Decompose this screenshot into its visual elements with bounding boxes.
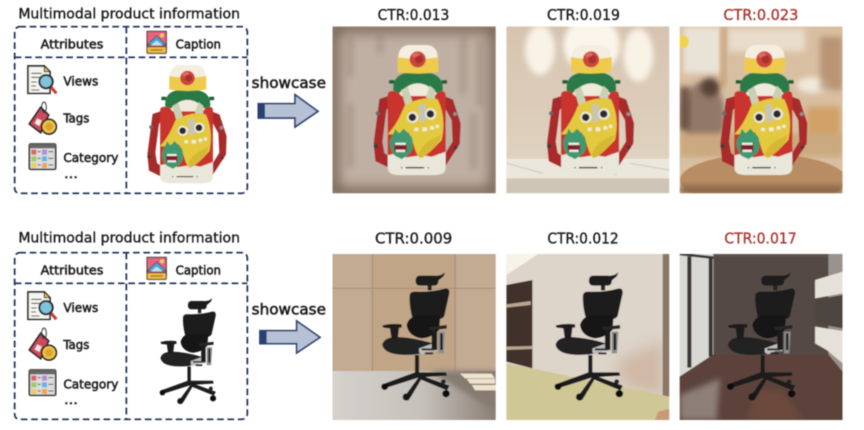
views label: Views bbox=[63, 301, 98, 315]
showcase label: showcase bbox=[252, 301, 326, 318]
views label: Views bbox=[63, 75, 98, 89]
showcase image: cream wall with shelf bbox=[506, 254, 669, 420]
heading: multimodal product information: Multimodal product information bbox=[18, 6, 240, 22]
category label: Category bbox=[63, 377, 118, 391]
dashed frame bbox=[15, 27, 247, 193]
icon: category bbox=[29, 370, 56, 395]
product image: bottle bbox=[147, 65, 226, 183]
category label: Category bbox=[63, 151, 118, 165]
showcase image: beige panel room bbox=[333, 254, 496, 420]
showcase image: blurred cafe bbox=[675, 27, 847, 206]
icon: caption picture bbox=[147, 257, 166, 279]
product image: chair bbox=[160, 298, 216, 404]
CTR label 0.019: CTR:0.019 bbox=[547, 7, 620, 24]
icon: caption picture bbox=[147, 31, 166, 53]
ellipsis: ... bbox=[64, 393, 78, 407]
showcase image: spotlit shelf bbox=[506, 17, 669, 193]
ellipsis: ... bbox=[64, 167, 78, 181]
tags label: Tags bbox=[62, 338, 89, 352]
caption heading: Caption bbox=[176, 37, 221, 51]
dashed frame bbox=[15, 253, 247, 419]
showcase image: painted wall bbox=[333, 27, 496, 193]
caption heading: Caption bbox=[176, 263, 221, 277]
showcase image: dark office bbox=[680, 254, 843, 420]
attributes heading: Attributes bbox=[41, 37, 103, 51]
CTR label 0.013: CTR:0.013 bbox=[378, 7, 449, 24]
icon: category bbox=[29, 144, 56, 169]
arrow bbox=[259, 321, 320, 353]
top row: product information bbox=[15, 6, 326, 193]
icon: views bbox=[28, 292, 56, 319]
panel: attributes and caption bbox=[15, 27, 247, 193]
CTR label 0.017: CTR:0.017 bbox=[724, 230, 797, 247]
icon: tags bbox=[29, 328, 56, 360]
CTR label 0.012: CTR:0.012 bbox=[547, 230, 619, 247]
icon: tags bbox=[29, 102, 56, 134]
arrow bbox=[258, 95, 318, 127]
tags label: Tags bbox=[62, 112, 89, 126]
bottom row: generated showcases bbox=[333, 230, 843, 420]
CTR label 0.023: CTR:0.023 bbox=[723, 7, 798, 24]
attributes heading: Attributes bbox=[41, 263, 103, 277]
heading: multimodal product information: Multimodal product information bbox=[18, 230, 240, 246]
bottom row: product information bbox=[15, 230, 326, 419]
showcase label: showcase bbox=[252, 75, 326, 92]
CTR label 0.009: CTR:0.009 bbox=[375, 230, 452, 247]
icon: views bbox=[28, 66, 56, 93]
panel: attributes and caption bbox=[15, 253, 247, 419]
top row: generated showcases bbox=[333, 7, 847, 206]
